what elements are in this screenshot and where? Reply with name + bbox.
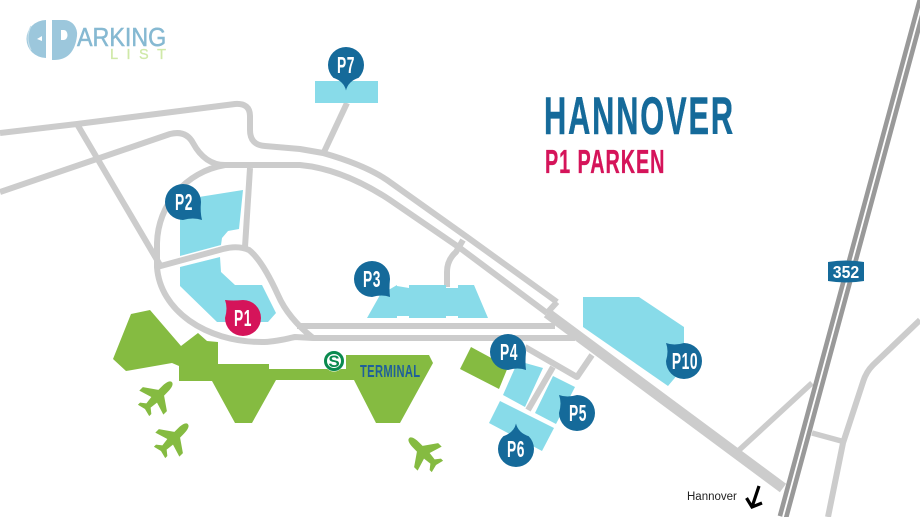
title: HANNOVER (544, 88, 733, 146)
building near P4 (460, 347, 508, 389)
area P1 (180, 257, 276, 322)
arrow to Hannover (746, 486, 762, 507)
pin P6: P6 (507, 438, 525, 463)
pin P2: P2 (175, 191, 193, 216)
parking areas (180, 81, 684, 451)
area P10 (583, 297, 684, 386)
pin P5 (559, 395, 595, 431)
pin P4 (490, 334, 526, 370)
motorway sign 352: 352 (833, 262, 859, 282)
pin P5: P5 (569, 402, 587, 427)
area P4 (503, 361, 543, 407)
pin P10 (666, 343, 702, 379)
logo: Parking List: LIST (110, 47, 166, 63)
area P6 (489, 401, 554, 451)
pin P7 (321, 40, 371, 90)
pin P2 (165, 184, 202, 220)
subtitle: P1 PARKEN (545, 143, 664, 180)
area P2 (180, 190, 243, 256)
pin P4: P4 (500, 341, 518, 366)
area P3 (367, 285, 488, 318)
icon: plane 2 (148, 412, 200, 464)
icon: S-Bahn (324, 350, 344, 372)
icon: plane 1 (132, 370, 184, 422)
pin P1 (225, 300, 261, 336)
icon: S-Bahn: S (328, 352, 340, 371)
area P7 (315, 81, 378, 103)
pin P6 (491, 424, 541, 474)
direction label Hannover: Hannover (687, 491, 737, 503)
pin P7: P7 (337, 54, 355, 79)
icon: plane 3 (397, 426, 449, 478)
area P5 (535, 376, 575, 424)
terminal buildings (113, 310, 433, 423)
logo: Parking List (27, 20, 166, 63)
motorway sign 352 (828, 260, 864, 282)
pin P10: P10 (672, 350, 698, 375)
motorway 352 (783, 0, 920, 517)
terminal label: TERMINAL (360, 361, 420, 382)
pin P3: P3 (363, 268, 381, 293)
pin P1: P1 (234, 307, 252, 332)
logo: Parking List: ARKING (77, 22, 166, 52)
pin P3 (354, 261, 390, 297)
